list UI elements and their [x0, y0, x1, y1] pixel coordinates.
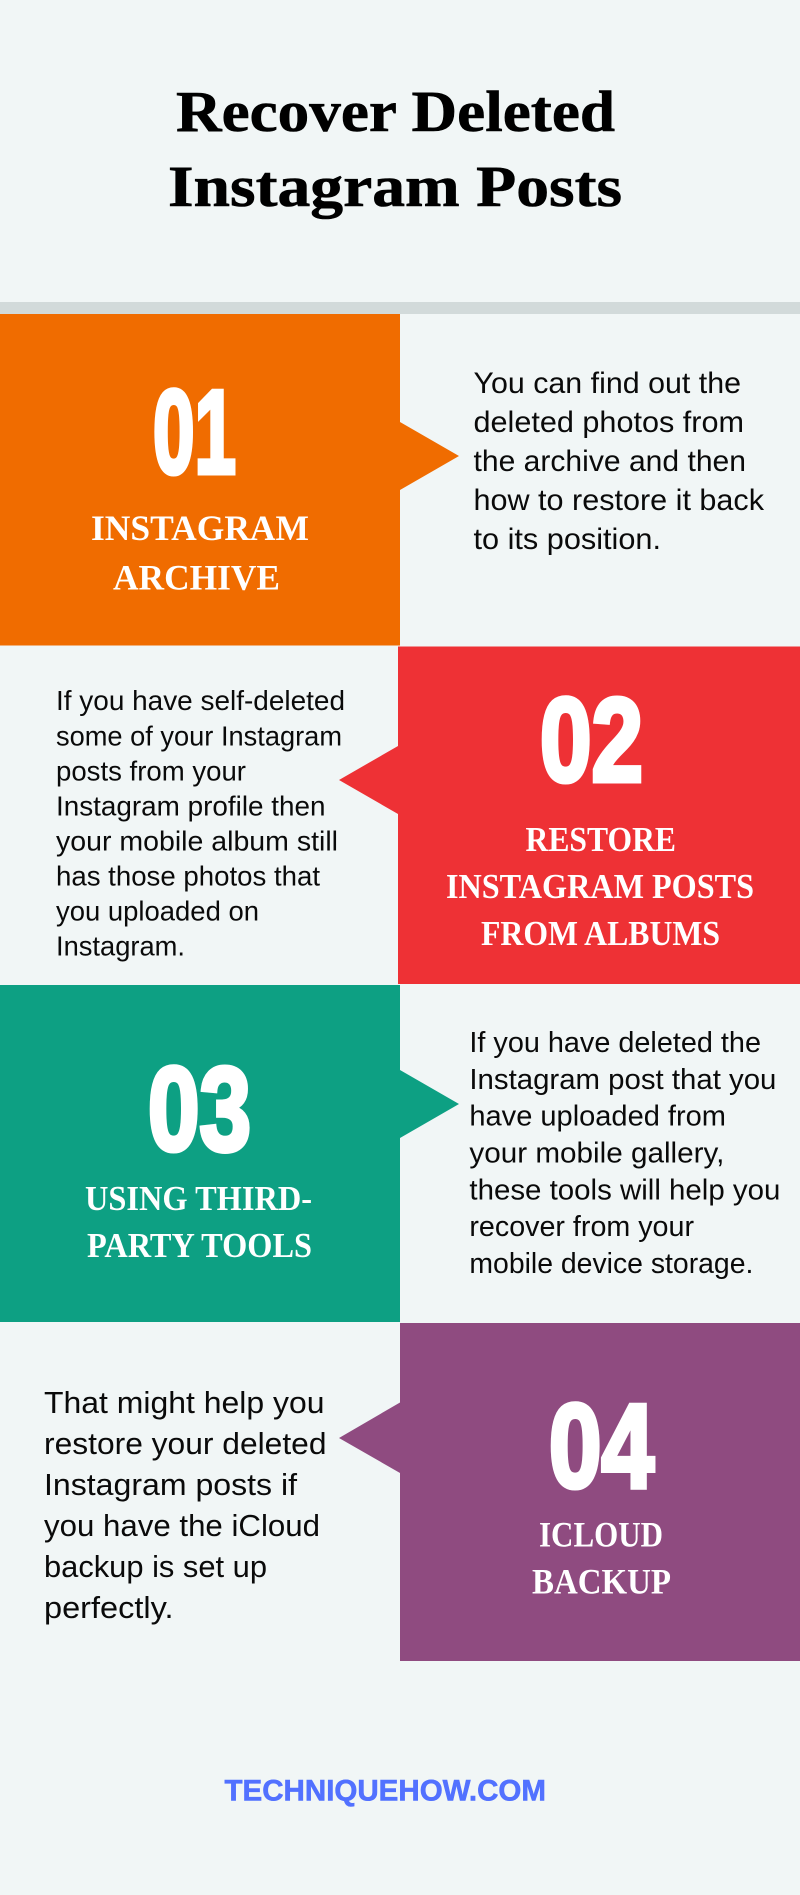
description text: has those photos that: [56, 860, 320, 891]
heading: restore instagram posts from albums: FROM ALBUMS: [481, 914, 720, 953]
number 03: 03: [148, 1043, 251, 1176]
description text: [56, 685, 345, 962]
heading: icloud backup: [532, 1515, 671, 1602]
description text: [44, 1385, 326, 1625]
title: Recover Deleted: [176, 79, 615, 144]
panel: step 3 third-party tools: [0, 985, 780, 1322]
description text: [469, 1027, 780, 1280]
panel: step 4 icloud backup: [44, 1323, 800, 1661]
panel: step 2 restore from albums: [56, 646, 800, 984]
green block with right arrow: [0, 985, 459, 1322]
description text: how to restore it back: [474, 484, 764, 517]
heading: instagram archive: [91, 508, 309, 598]
number 04: 04: [549, 1380, 654, 1513]
purple block with left arrow: [339, 1323, 800, 1661]
description text: you have the iCloud: [44, 1508, 320, 1543]
description text: Instagram profile then: [56, 791, 326, 822]
description text: to its position.: [474, 523, 661, 556]
heading: instagram archive: INSTAGRAM: [91, 508, 309, 548]
description text: Instagram.: [56, 930, 185, 962]
description text: your mobile gallery,: [469, 1138, 724, 1170]
heading: restore instagram posts from albums: INSTAGRAM POSTS: [446, 867, 754, 906]
number 02: 02: [540, 674, 643, 807]
description text: some of your Instagram: [56, 720, 342, 751]
description text: have uploaded from: [469, 1101, 726, 1133]
heading: icloud backup: ICLOUD: [539, 1515, 663, 1555]
heading: restore instagram posts from albums: RESTORE: [526, 820, 676, 859]
heading: instagram archive: ARCHIVE: [113, 558, 280, 598]
title: [168, 79, 622, 219]
heading: restore instagram posts from albums: [446, 820, 754, 953]
heading: using third-party tools: USING THIRD-: [85, 1179, 312, 1218]
title: Instagram Posts: [168, 154, 622, 219]
number 01: 01: [153, 366, 236, 499]
heading: using third-party tools: PARTY TOOLS: [87, 1226, 312, 1265]
panel: step 1 instagram archive: [0, 314, 764, 646]
footer website: TECHNIQUEHOW.COM: [224, 1775, 546, 1808]
orange block with right arrow: [0, 314, 459, 646]
description text: [474, 367, 764, 556]
description text: restore your deleted: [44, 1426, 326, 1461]
description text: recover from your: [469, 1211, 695, 1243]
description text: posts from your: [56, 756, 246, 786]
description text: If you have deleted the: [469, 1027, 761, 1059]
description text: backup is set up: [44, 1549, 267, 1584]
heading: icloud backup: BACKUP: [532, 1562, 671, 1602]
description text: the archive and then: [474, 445, 746, 478]
description text: you uploaded on: [56, 896, 259, 927]
heading: using third-party tools: [85, 1179, 312, 1265]
description text: Instagram post that you: [469, 1064, 776, 1096]
red block with left arrow: [339, 646, 800, 984]
description text: You can find out the: [474, 367, 741, 400]
description text: perfectly.: [44, 1590, 174, 1625]
description text: deleted photos from: [474, 406, 744, 439]
description text: your mobile album still: [56, 826, 338, 856]
description text: mobile device storage.: [469, 1248, 753, 1280]
description text: If you have self-deleted: [56, 685, 345, 716]
description text: Instagram posts if: [44, 1467, 297, 1502]
description text: That might help you: [44, 1385, 324, 1420]
description text: these tools will help you: [469, 1174, 780, 1206]
